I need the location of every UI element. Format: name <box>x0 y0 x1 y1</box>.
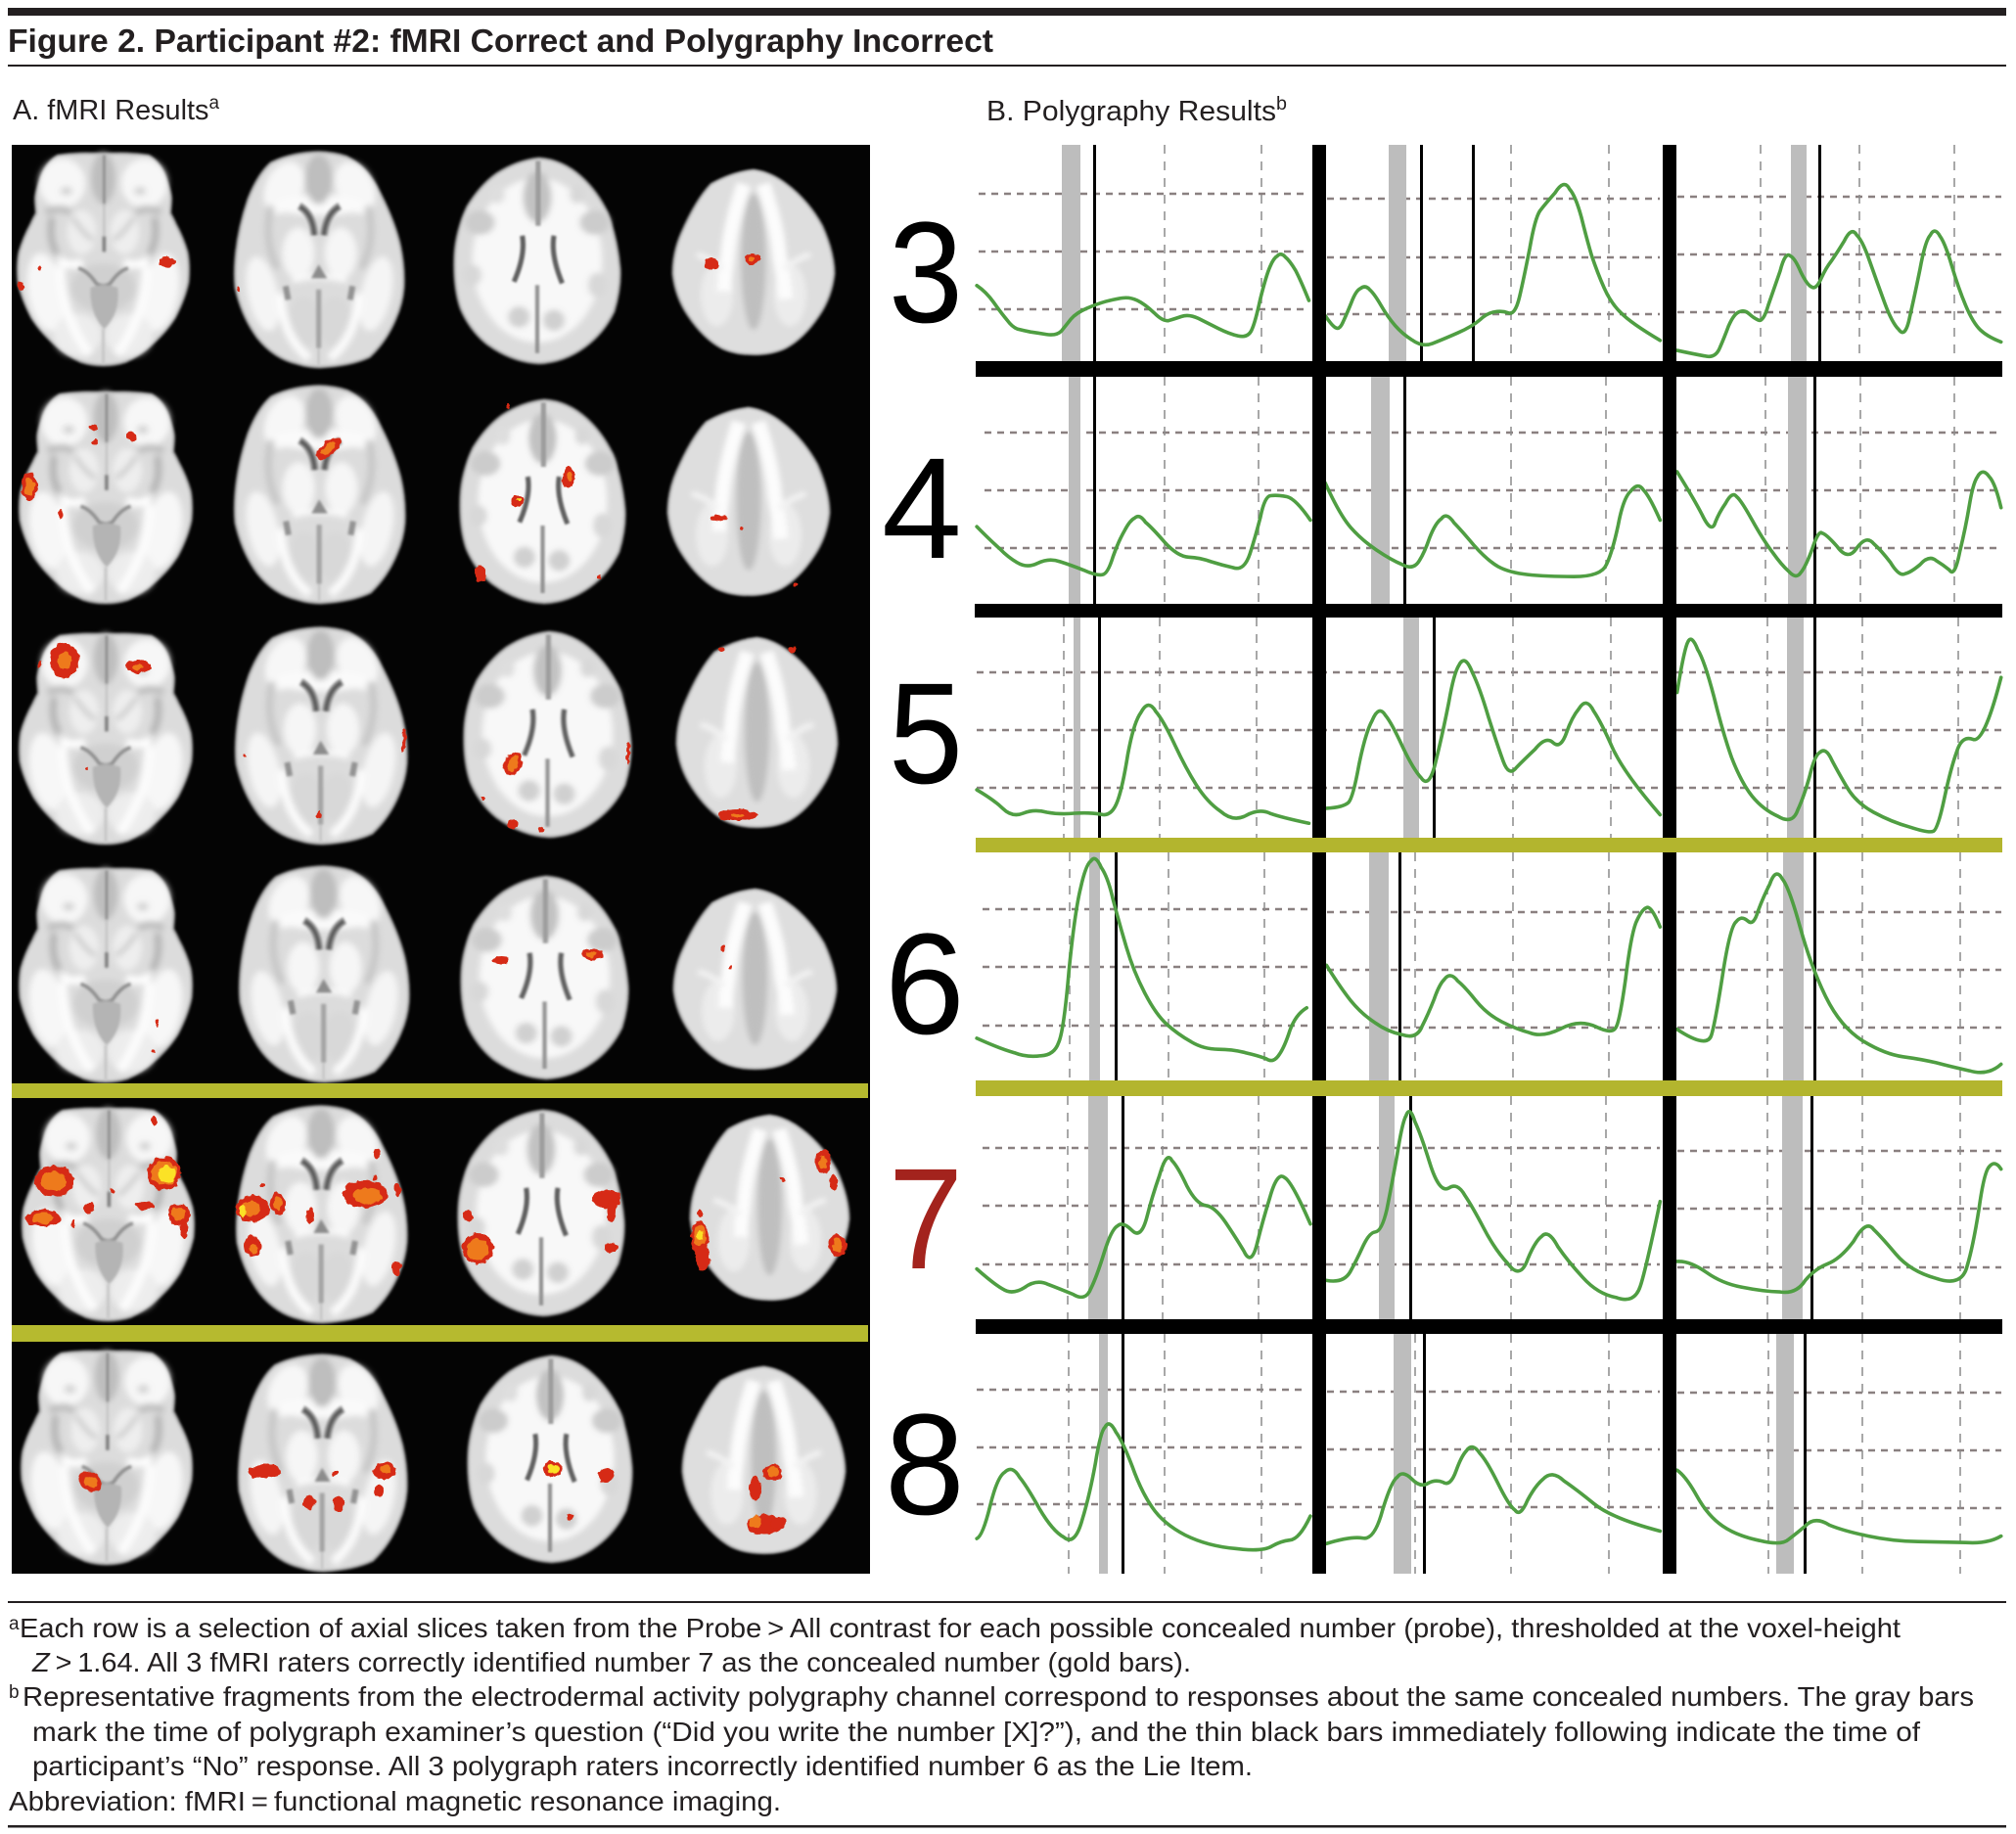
footnote a: Each row is a selection of axial slices taken from the Probe > All contrast for each possible concealed number (probe), thresholded at the voxel-height <box>20 1613 1901 1643</box>
question and response markers <box>1062 145 1821 361</box>
polygraph row for number 7 <box>889 1096 2001 1319</box>
footnote b: b <box>9 1682 20 1703</box>
slice 3 <box>469 1356 631 1562</box>
footnote b <box>9 1681 1974 1781</box>
slice 4 <box>674 890 836 1069</box>
question and response markers <box>1099 1334 1807 1574</box>
fMRI row for number 4 <box>20 387 829 603</box>
slice 1 <box>23 1108 194 1320</box>
slice 3 <box>459 1111 623 1315</box>
slice 3 <box>455 159 619 363</box>
slice 2 <box>236 628 406 844</box>
question and response markers <box>1089 852 1816 1080</box>
electrodermal traces <box>977 472 2001 576</box>
thick vertical separators <box>1312 145 1676 1574</box>
slice 2 <box>236 1107 406 1322</box>
gold bars marking number 6 row <box>976 838 2002 1096</box>
footnote b: participant’s “No” response. All 3 polygraph raters incorrectly identified number 6 as the Lie Item. <box>32 1751 1253 1781</box>
heading: A. fMRI Results: A. fMRI Results <box>13 95 209 126</box>
fMRI row for number 6 <box>20 867 836 1081</box>
footnote a <box>9 1613 1901 1677</box>
slice 2 <box>235 387 404 603</box>
number label 7: 7 <box>889 1139 963 1300</box>
slice 3 <box>461 400 624 603</box>
footnotes <box>8 1601 2006 1828</box>
footnote b: Representative fragments from the electrodermal activity polygraphy channel correspond to responses about the same concealed numbers. The gray bars <box>23 1681 1974 1712</box>
abbreviation note: Abbreviation: fMRI = functional magnetic resonance imaging. <box>9 1786 781 1816</box>
heading: B. Polygraphy Results: B. Polygraphy Results <box>986 96 1265 127</box>
slice 2 <box>239 1355 406 1571</box>
number label 3: 3 <box>889 193 963 353</box>
panel: polygraphy traces <box>882 145 2002 1574</box>
heading: A. fMRI Results: a <box>208 93 219 114</box>
electrodermal traces <box>977 1424 2001 1550</box>
fMRI row for number 8 <box>22 1351 845 1571</box>
slice 4 <box>691 1116 848 1300</box>
slice 4 <box>668 408 829 595</box>
question and response markers <box>1069 377 1816 604</box>
gold bar above number 7 row <box>12 1083 868 1098</box>
number label 8: 8 <box>885 1385 965 1545</box>
footnote a: Z > 1.64. All 3 fMRI raters correctly identified number 7 as the concealed number (gold bars). <box>31 1647 1191 1677</box>
fMRI row for number 3 <box>18 153 834 367</box>
slice 3 <box>462 877 627 1078</box>
header top bar <box>8 8 2006 16</box>
slice 4 <box>673 170 834 354</box>
footnote b: mark the time of polygraph examiner’s question (“Did you write the number [X]?”), and the thin black bars immediately following indicate the time of <box>32 1717 1920 1747</box>
title: Figure 2. Participant #2: fMRI Correct and Polygraphy Incorrect <box>8 23 993 59</box>
fMRI row for number 5 <box>20 628 837 844</box>
number label 4: 4 <box>882 429 962 589</box>
slice 1 <box>20 391 192 603</box>
number label 6: 6 <box>885 904 965 1065</box>
slice 1 <box>18 153 189 365</box>
thick horizontal separators <box>975 361 2002 1334</box>
slice 1 <box>22 1351 192 1564</box>
fMRI row for number 7 <box>23 1107 848 1322</box>
number label 5: 5 <box>889 654 963 814</box>
gold bar below number 7 row <box>12 1325 868 1342</box>
slice 4 <box>683 1367 845 1553</box>
slice 1 <box>20 633 192 844</box>
electrodermal traces <box>977 858 2001 1073</box>
heading: B. Polygraphy Results: b <box>1276 94 1287 115</box>
panel: fMRI axial brain slices <box>12 145 870 1574</box>
slice 3 <box>465 632 630 837</box>
polygraph row for number 4 <box>882 377 2001 604</box>
slice 1 <box>20 868 192 1081</box>
question and response markers <box>1088 1096 1813 1319</box>
slice 2 <box>240 867 408 1081</box>
polygraph row for number 5 <box>889 618 2001 838</box>
electrodermal traces <box>977 185 2001 356</box>
polygraph row for number 3 <box>889 145 2001 361</box>
slice 2 <box>235 153 403 367</box>
question and response markers <box>1074 618 1816 838</box>
slice 4 <box>677 638 837 827</box>
electrodermal traces <box>977 1112 2001 1300</box>
polygraph row for number 6 <box>885 852 2001 1080</box>
polygraph row for number 8 <box>885 1334 2001 1574</box>
electrodermal traces <box>977 639 2001 832</box>
footnote a: a <box>9 1614 20 1634</box>
